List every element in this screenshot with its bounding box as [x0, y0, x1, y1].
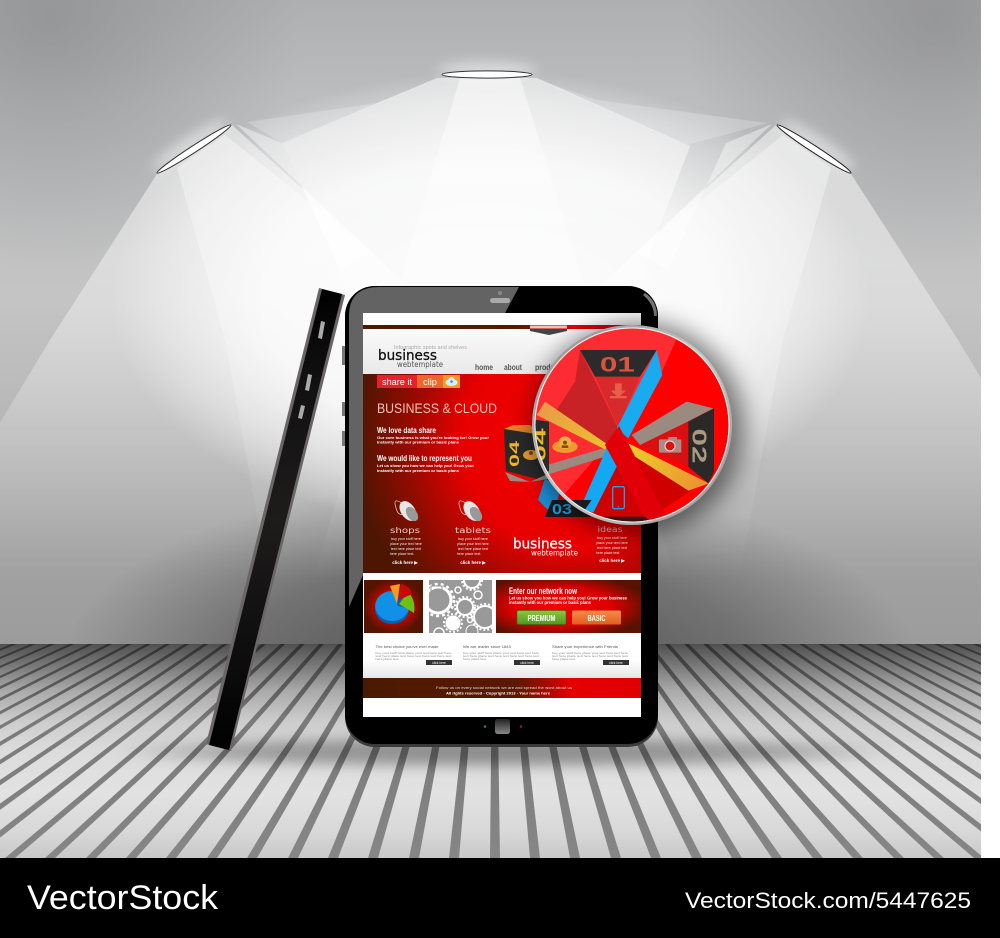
header tagline: Infographic spots and shelves: [394, 345, 468, 351]
copy block 2 text: [377, 463, 474, 473]
description: place your text here: [390, 542, 422, 546]
description: buy your stuff here: [391, 537, 421, 541]
right margin strip: [981, 0, 1000, 858]
column 1: The best choice you've ever made: [376, 644, 439, 649]
lens red ground: [536, 328, 728, 522]
copy block 1 text: instantly with our premium or basic plans: [377, 440, 460, 444]
03 label: 03: [552, 501, 572, 518]
copy block 2 text: Let us show you how we can help you! Grow your: [377, 463, 474, 468]
04 label: 04: [506, 441, 522, 467]
description: buy your stuff here: [597, 536, 627, 540]
03 panel: [542, 500, 592, 517]
header band: [363, 329, 641, 374]
info columns: [363, 633, 641, 678]
business: business: [513, 536, 572, 552]
column 3: click here: [609, 661, 623, 665]
device button 2: [305, 374, 312, 391]
lens inner rim: [534, 328, 730, 522]
column 3: text here place text here text here text here text: [552, 654, 628, 658]
description: [457, 537, 489, 556]
nav: products: products: [535, 363, 565, 372]
striped floor: [0, 644, 981, 858]
cloud icon small: [523, 450, 537, 458]
pie shadow side: [375, 594, 409, 624]
darker red lower: [588, 467, 648, 522]
column 1: buy your stuff here place your text here text here: [376, 651, 452, 655]
tablet glass reflection: [349, 287, 519, 607]
beam: faint right wedge: [553, 85, 767, 144]
column 1: here place text.: [376, 657, 400, 661]
device button 1: [318, 321, 325, 339]
column 3: here place text.: [552, 657, 576, 661]
orange ribbon: [504, 425, 560, 458]
description: buy your stuff here: [458, 537, 488, 541]
red ribbon centre: [605, 426, 665, 522]
pie red slice: [399, 584, 412, 600]
copy block 2 heading: We would like to represent you: [377, 454, 472, 463]
label: ideas: [598, 525, 622, 534]
camera icon: [659, 437, 681, 453]
yellow ribbon right: [628, 443, 709, 491]
corner highlight: [643, 293, 657, 316]
lens rim line: [535, 328, 729, 522]
click here: click here ▶: [392, 560, 419, 565]
small cloud: [523, 450, 539, 460]
floor contact shadow: [105, 735, 905, 769]
column 3: [552, 644, 629, 665]
description: place your text here: [596, 541, 628, 545]
top ribbon: [363, 325, 641, 329]
blue ribbon lower: [580, 448, 618, 513]
04 label fragment: 04: [531, 427, 550, 462]
watermark band: [0, 858, 1000, 938]
01 label: 01: [600, 353, 635, 377]
lower right shadow: [635, 457, 692, 510]
device body: [206, 288, 345, 751]
column 1: click here: [432, 661, 446, 665]
beam: right outer: [700, 125, 981, 495]
lamp glows: [149, 62, 859, 176]
body text: [509, 596, 628, 605]
panel background: [364, 580, 423, 633]
ribbon tab: [530, 326, 567, 328]
brand name: VectorStock: [27, 879, 219, 917]
label: tablets: [455, 526, 491, 535]
button: basic: [572, 610, 621, 624]
column 2: We are leader since 1843: [463, 644, 512, 649]
tab: clip: [417, 375, 443, 388]
beam: left core: [177, 136, 253, 209]
pie chart panel: [364, 580, 423, 633]
copy block 1 heading: We love data share: [377, 426, 436, 435]
lower logo: [513, 536, 578, 558]
beam: centre core: [450, 78, 531, 114]
footer line 1: Follow us on every social network we are and spread the word about us: [436, 685, 572, 690]
mouse icon: [395, 498, 421, 524]
screen background: [363, 313, 641, 717]
click here: click here ▶: [599, 558, 626, 563]
yellow ribbon left: [537, 402, 608, 449]
button: basic: BASIC: [588, 614, 606, 623]
column 2: buy your stuff here place your text here text here: [463, 651, 540, 655]
beam: right gap fill: [688, 124, 772, 204]
04 panel fragment: [525, 420, 549, 472]
footer band: [363, 678, 641, 698]
lamp: centre: [442, 71, 532, 78]
column 1: text here place text here text here text here text: [376, 654, 452, 658]
mouse icon: [459, 498, 485, 524]
beam: faint left wedge: [248, 103, 376, 142]
description: [390, 537, 422, 556]
03 label: 03: [552, 501, 573, 518]
column 1: [376, 644, 452, 665]
blue ribbon tail: [538, 483, 558, 517]
lighter red area: [536, 328, 676, 494]
tablet: [342, 286, 658, 747]
back wall: [0, 0, 981, 644]
lens content: [536, 328, 728, 522]
gears panel: [429, 580, 492, 633]
lens ring: [532, 325, 732, 525]
call to action panel: [496, 580, 641, 633]
03 panel: [545, 500, 595, 517]
red led: [520, 725, 522, 728]
nav: home: home: [475, 363, 493, 372]
label: shops: [390, 526, 420, 535]
beam: left gap fill: [236, 124, 301, 185]
description: [596, 536, 628, 555]
copy block 1 text: Our core business is what you're looking for! Grow your: [377, 435, 489, 440]
feature: ideas: [596, 525, 628, 563]
device glyph: [431, 586, 442, 594]
green led: [484, 725, 486, 728]
panel background: [429, 580, 492, 633]
hero panel: [363, 374, 641, 573]
magnifier shadow: [532, 322, 744, 534]
feature: shops: [390, 498, 422, 565]
gears: [429, 580, 492, 633]
image url: VectorStock.com/5447625: [685, 888, 971, 913]
beam: centre outer: [282, 78, 690, 199]
tab: cloud icon: [443, 375, 460, 388]
description: here place text.: [457, 552, 481, 556]
footer background: [363, 678, 641, 698]
download icon: [610, 383, 627, 398]
description: place your text here: [457, 542, 489, 546]
grey ribbon right: [632, 402, 713, 445]
column 2: here place text.: [463, 657, 487, 661]
lamps: [149, 62, 859, 176]
tablet screen: web template: [363, 313, 641, 717]
tab: share it: share it: [382, 377, 413, 387]
infographic behind lens: [504, 425, 600, 518]
column 2: click here: [520, 661, 534, 665]
body text: instantly with our premium or basic plans: [509, 600, 592, 605]
dark strip lower: [600, 517, 650, 522]
click here: click here ▶: [460, 560, 487, 565]
button: premium: PREMIUM: [528, 614, 556, 623]
pie green slice: [399, 592, 414, 613]
button: premium: [517, 610, 566, 624]
column 3: buy your stuff here place your text here text here: [552, 651, 629, 655]
pie blue slice: [375, 591, 409, 621]
pie orange slice: [390, 584, 400, 604]
ribbon chevron: [530, 329, 567, 335]
grey ribbon: [505, 450, 600, 482]
front camera: [490, 291, 510, 303]
logo: business: business: [378, 348, 437, 364]
blue ribbon: [538, 478, 560, 516]
grey ribbon left: [544, 448, 606, 474]
tablet edge: [345, 286, 658, 747]
panel background: [496, 580, 641, 633]
body text: Let us show you how we can help you! Grow your business: [509, 596, 628, 600]
feature: tablets: [455, 498, 491, 565]
band background: [0, 858, 1000, 938]
lamp: left: [155, 122, 233, 176]
lamp: right: [775, 122, 853, 176]
copy block 2 text: instantly with our premium or basic plans: [377, 468, 460, 473]
spotlight beams: [0, 70, 981, 557]
nav: about: about: [504, 363, 522, 372]
column 3: Share your experience with Friends: [552, 644, 618, 649]
tab: share it: [377, 375, 417, 388]
tab: clip: clip: [423, 377, 437, 387]
beam: right core: [744, 136, 831, 232]
04 panel: [504, 429, 549, 482]
device face: [209, 289, 342, 750]
home button: [495, 719, 510, 734]
description: text here place text: [458, 547, 488, 551]
magnifying lens: [532, 325, 732, 525]
description: here place text.: [390, 552, 414, 556]
description: text here place text: [597, 546, 627, 550]
phone icon: [613, 487, 624, 509]
device button 3: [298, 405, 305, 419]
side view device: [206, 288, 345, 751]
description: text here place text: [391, 547, 421, 551]
tablet body: [345, 286, 658, 744]
webtemplate: webtemplate: [531, 548, 578, 558]
blue ribbon upper: [617, 350, 662, 438]
beam: left outer: [0, 125, 308, 495]
hero title: BUSINESS & CLOUD: [377, 401, 497, 416]
02 label: 02: [688, 428, 711, 463]
footer line 2: All rights reserved - Copyright 2013 - Your name here: [446, 690, 551, 696]
heading: Enter our network now: [509, 586, 578, 596]
tablet side buttons: [342, 346, 345, 446]
description: here place text.: [596, 551, 620, 555]
column 2: text here place text here text here text here text: [463, 654, 539, 658]
columns background: [363, 633, 641, 678]
cloud icon large: [552, 436, 578, 453]
01 panel: [580, 350, 657, 377]
darker funnel left: [549, 350, 618, 445]
funnel centre: [595, 377, 640, 427]
right pocket: [640, 422, 688, 467]
logo: webtemplate: webtemplate: [397, 360, 443, 369]
02 panel: [688, 408, 714, 483]
copy block 1 text: [377, 435, 489, 444]
column 2: [463, 644, 540, 665]
